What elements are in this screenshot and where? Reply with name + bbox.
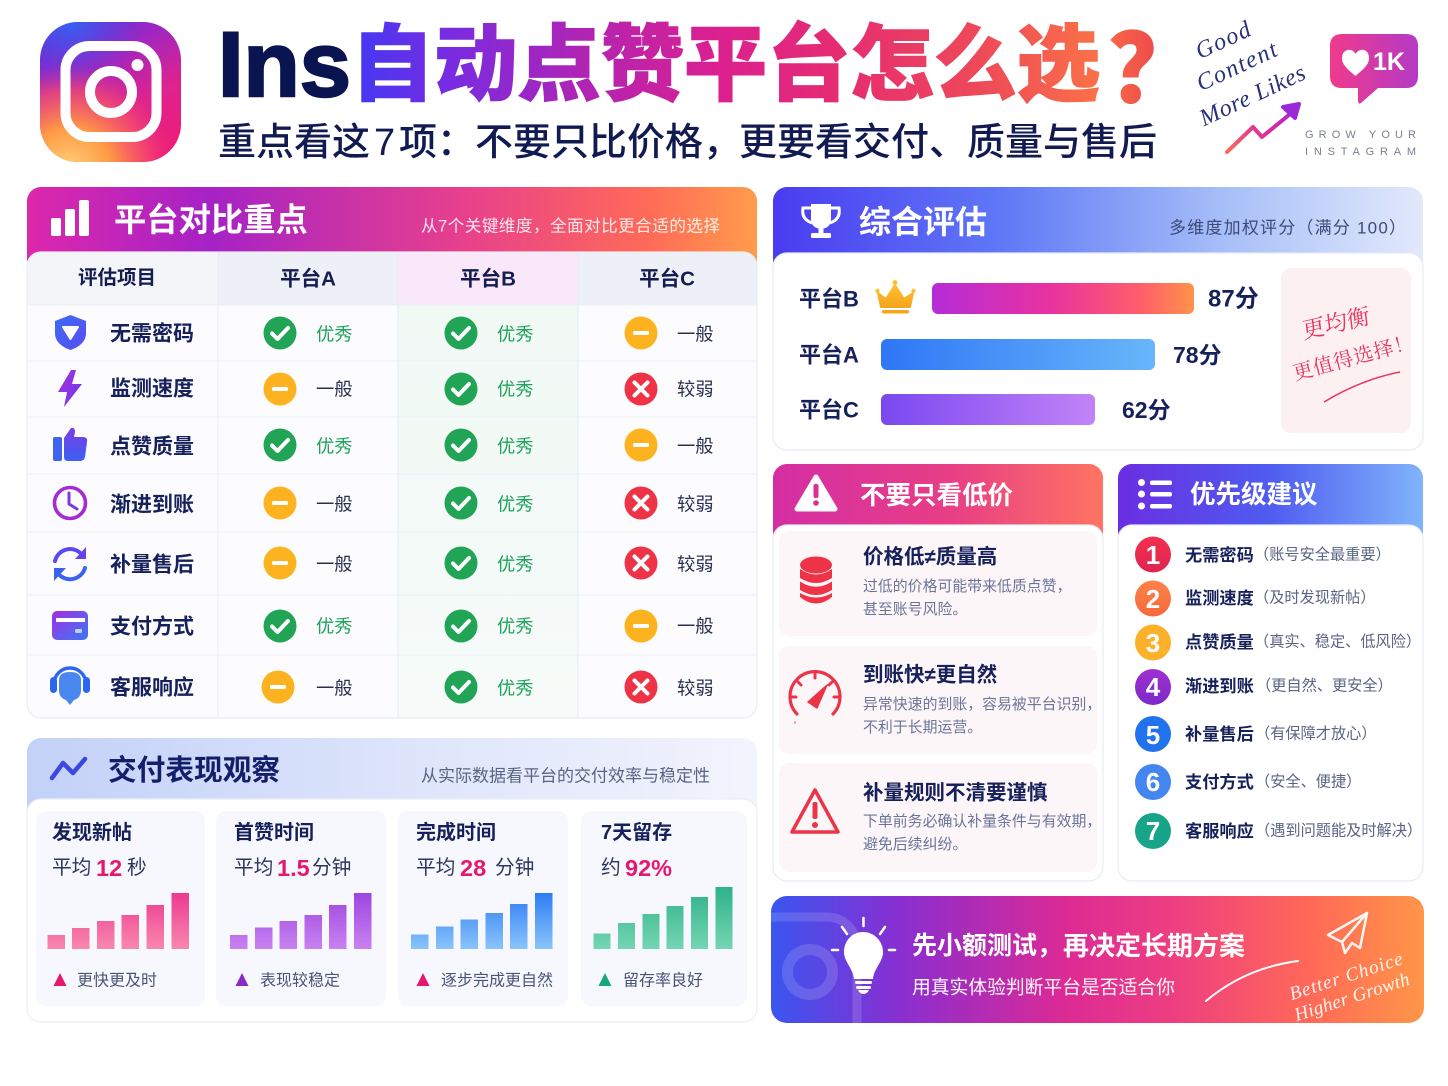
row: 支付方式: 优秀 (497, 616, 534, 636)
comparison subtitle: 从7个关键维度，全面对比更合适的选择 (421, 216, 720, 236)
priority 6: 6 (1146, 767, 1160, 797)
subtitle: 7 (374, 122, 395, 164)
row: 支付方式: 优秀 (316, 616, 353, 636)
handwritten tagline: Higher Growth (1291, 969, 1412, 1026)
heading: comparison: 平台对比重点 (114, 202, 308, 238)
card: 7天留存: 约 (601, 857, 621, 879)
row: 点赞质量: 点赞质量 (110, 436, 194, 458)
priority 3: 点赞质量 (1185, 632, 1254, 652)
row: 渐进到账: 较弱 (677, 494, 714, 514)
panel body: low price (773, 525, 1103, 881)
comparison table (27, 252, 757, 718)
icon: like bubble: 1K (1373, 48, 1405, 76)
row: 客服响应: 一般 (316, 678, 353, 698)
icon: trophy (803, 204, 839, 238)
callout: handwritten note: 更值得选择！ (1289, 326, 1417, 386)
icon: trend line (52, 759, 85, 778)
card: refill rules (779, 763, 1101, 872)
icon: warning (797, 477, 835, 509)
panel: delivery performance (27, 738, 757, 1022)
panel: platform comparison (27, 187, 757, 718)
table header: 评估项目 (78, 267, 156, 289)
priority 2: 2 (1146, 584, 1160, 614)
subtitle: 不要只比价格， (475, 122, 741, 164)
priority 1 (1135, 536, 1391, 572)
banner heading: 先小额测试， (912, 932, 1062, 960)
row: 点赞质量 (53, 428, 714, 462)
priority 5 (1135, 716, 1376, 752)
card: 7天留存: 92% (625, 855, 672, 881)
bar: 平台B (799, 280, 1259, 314)
table header (78, 266, 695, 290)
row: 支付方式: 支付方式 (110, 614, 194, 638)
card: price vs quality (779, 531, 1097, 636)
priority 3 (1135, 624, 1421, 660)
title: ？ (1108, 17, 1203, 123)
panel header: delivery (27, 738, 757, 828)
row: 客服响应: 优秀 (497, 678, 534, 698)
row: 点赞质量: 优秀 (497, 436, 534, 456)
title: Ins (218, 14, 351, 116)
callout: handwritten note (1281, 268, 1417, 433)
priority 6 (1135, 764, 1361, 800)
row: 客服响应 (50, 668, 714, 705)
card: price vs quality: 价格低≠质量高 (863, 544, 997, 568)
card: 完成时间: 分钟 (495, 857, 534, 879)
bar chart (48, 893, 189, 949)
priority 1: （账号安全最重要） (1254, 546, 1391, 564)
decorative swoosh arrow (1206, 961, 1298, 1001)
card: 发现新帖: 12 (96, 855, 122, 881)
priority 7: 7 (1146, 816, 1160, 846)
icon: list (1138, 479, 1172, 510)
row: 无需密码: 一般 (677, 324, 714, 344)
handwritten slogan: Good (1192, 16, 1256, 65)
bar: 平台A: 78分 (1173, 342, 1222, 368)
card: speed vs natural (779, 646, 1101, 754)
overall score subtitle: 多维度加权评分（满分 100） (1169, 218, 1406, 238)
priority 7 (1135, 813, 1422, 849)
card: speed vs natural: 异常快速的到账，容易被平台识别， (863, 696, 1101, 713)
row: 渐进到账 (54, 486, 714, 520)
priority 5: （有保障才放心） (1255, 724, 1376, 742)
card: 完成时间: 平均 (416, 857, 455, 879)
card: 7天留存 (581, 811, 747, 1006)
row: 客服响应: 较弱 (677, 678, 714, 698)
priority 4: 4 (1146, 672, 1161, 702)
icon: bar chart (51, 200, 89, 236)
handwritten tagline: Better Choice (1287, 949, 1405, 1005)
card: 发现新帖: 秒 (127, 857, 147, 879)
card: 发现新帖 (36, 811, 205, 1006)
panel body: delivery (27, 799, 757, 1022)
card: 首赞时间: 首赞时间 (234, 821, 314, 844)
bar: 平台B: 87分 (1208, 286, 1259, 312)
priority 1: 1 (1146, 540, 1160, 570)
priority 2: 监测速度 (1185, 588, 1254, 608)
heading: priority: 优先级建议 (1190, 481, 1318, 509)
row: 无需密码: 无需密码 (110, 322, 194, 346)
bar: 平台C: 62分 (1122, 397, 1171, 423)
tagline: grow your instagram: INSTAGRAM (1305, 146, 1416, 158)
bar: 平台B: 平台B (799, 286, 859, 312)
row: 客服响应: 客服响应 (110, 676, 194, 700)
card: speed vs natural: 不利于长期运营。 (863, 719, 982, 736)
card: 首赞时间: 1.5 (277, 855, 310, 881)
row: 渐进到账: 一般 (316, 494, 353, 514)
icon: growth arrow (1227, 104, 1299, 152)
row: 补量售后: 优秀 (497, 554, 534, 574)
table header: 平台B (460, 266, 516, 290)
priority 3: （真实、稳定、低风险） (1254, 632, 1421, 650)
icon: paper plane (1328, 913, 1367, 953)
card: price vs quality: 甚至账号风险。 (863, 601, 967, 618)
card: refill rules: 下单前务必确认补量条件与有效期， (863, 813, 1101, 830)
panel header: priority (1118, 464, 1423, 554)
delivery subtitle: 从实际数据看平台的交付效率与稳定性 (421, 766, 710, 786)
callout: handwritten note: 更均衡 (1300, 297, 1371, 346)
bar chart (594, 887, 732, 949)
row: 补量售后: 较弱 (677, 554, 714, 574)
panel header: overall score (773, 187, 1423, 282)
priority 2: （及时发现新帖） (1254, 590, 1376, 606)
row: 补量售后: 补量售后 (110, 554, 194, 576)
row: 监测速度: 较弱 (677, 378, 714, 400)
priority 6: （安全、便捷） (1255, 772, 1361, 790)
card: refill rules: 补量规则不清要谨慎 (863, 780, 1048, 804)
card: price vs quality: 过低的价格可能带来低质点赞， (863, 578, 1071, 595)
priority 1: 无需密码 (1185, 545, 1254, 565)
icon: light bulb (832, 918, 895, 994)
priority 4 (1135, 669, 1393, 705)
banner subheading: 用真实体验判断平台是否适合你 (912, 976, 1175, 998)
panel header: low price (773, 464, 1103, 554)
row: 监测速度: 监测速度 (110, 378, 194, 400)
priority 5: 补量售后 (1185, 724, 1254, 744)
row: 补量售后: 一般 (316, 554, 353, 574)
table header: 平台C (639, 266, 695, 290)
heading: delivery: 交付表现观察 (108, 755, 280, 787)
panel: overall score (773, 187, 1423, 450)
card: 发现新帖: 更快更及时 (77, 972, 157, 990)
card: 完成时间 (398, 811, 568, 1006)
card: 完成时间: 逐步完成更自然 (441, 972, 553, 990)
row: 点赞质量: 一般 (677, 436, 714, 456)
banner heading: 再决定长期方案 (1063, 931, 1245, 961)
row: 无需密码: 优秀 (316, 324, 353, 344)
row: 支付方式: 一般 (677, 616, 714, 636)
bar: 平台A (799, 339, 1222, 370)
panel body: overall score (773, 253, 1423, 450)
card: 完成时间: 28 (460, 855, 486, 881)
card: 7天留存: 留存率良好 (623, 972, 703, 990)
priority 2 (1135, 580, 1376, 616)
heading: overall score: 综合评估 (859, 204, 987, 240)
row: 监测速度: 一般 (316, 378, 353, 400)
card: speed vs natural: 到账快≠更自然 (863, 662, 997, 686)
heading: low price: 不要只看低价 (860, 482, 1013, 510)
priority 7: （遇到问题能及时解决） (1255, 822, 1422, 840)
bar chart (230, 893, 372, 949)
tagline: grow your instagram: GROW YOUR (1305, 129, 1416, 141)
row: 监测速度 (58, 370, 714, 407)
priority 3: 3 (1146, 628, 1160, 658)
subtitle: 更要看交付、质量与售后 (739, 122, 1157, 164)
row: 无需密码 (55, 315, 714, 350)
priority 7: 客服响应 (1185, 821, 1254, 841)
row: 点赞质量: 优秀 (316, 436, 353, 456)
icon: gauge (790, 672, 840, 723)
panel body: priority (1118, 525, 1423, 881)
panel: priority suggestions (1118, 464, 1423, 881)
icon: instagram logo (40, 22, 181, 162)
subtitle: 重点看这 (218, 122, 370, 164)
row: 渐进到账: 优秀 (497, 494, 534, 514)
table header: 平台A (280, 266, 336, 290)
card: 首赞时间: 分钟 (312, 857, 351, 879)
bar: 平台C: 平台C (799, 398, 859, 422)
panel header: comparison (27, 187, 757, 282)
priority 4: 渐进到账 (1185, 676, 1254, 696)
card: 发现新帖: 平均 (52, 857, 91, 879)
icon: database (800, 556, 832, 604)
handwritten slogan: More Likes (1195, 60, 1310, 132)
row: 监测速度: 优秀 (497, 378, 534, 400)
priority 5: 5 (1146, 720, 1160, 750)
subtitle: 项： (399, 122, 475, 164)
row: 无需密码: 优秀 (497, 324, 534, 344)
row: 补量售后 (54, 546, 714, 581)
row: 支付方式 (52, 610, 714, 642)
handwritten slogan: Content (1193, 36, 1283, 97)
card: 首赞时间: 平均 (234, 857, 273, 879)
icon: like bubble (1330, 34, 1418, 104)
card: refill rules: 避免后续纠纷。 (863, 836, 967, 853)
tagline: grow your instagram (1305, 129, 1416, 158)
card: 发现新帖: 发现新帖 (52, 821, 132, 844)
icon: crown (875, 280, 916, 314)
row: 渐进到账: 渐进到账 (110, 494, 194, 516)
bar: 平台A: 平台A (799, 342, 859, 368)
icon: warning outline (792, 790, 838, 832)
bar: 平台C (799, 394, 1171, 425)
card: 首赞时间 (216, 811, 386, 1006)
card: 7天留存: 7天留存 (601, 820, 672, 844)
handwritten slogan (1192, 16, 1310, 132)
priority 6: 支付方式 (1185, 772, 1254, 792)
panel: do not only look at low price (773, 464, 1103, 881)
card: 首赞时间: 表现较稳定 (260, 972, 340, 990)
bar chart (411, 893, 552, 949)
title: 自动点赞平台怎么选 (351, 18, 1100, 112)
priority 4: （更自然、更安全） (1256, 676, 1393, 694)
banner: call to action (771, 896, 1424, 1023)
card: 完成时间: 完成时间 (416, 820, 496, 844)
title (218, 14, 1203, 123)
